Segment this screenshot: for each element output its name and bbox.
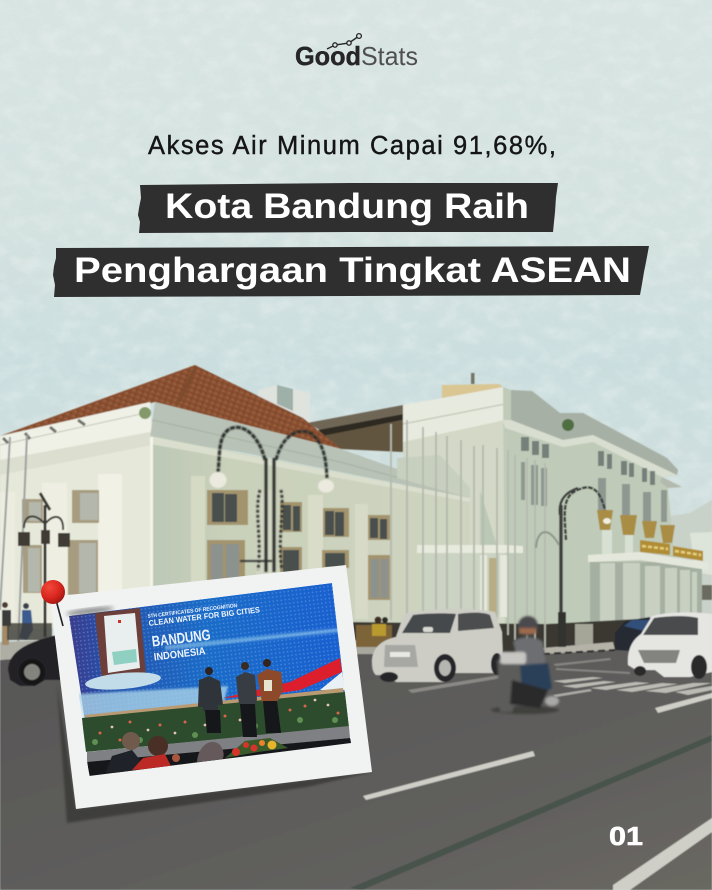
- backdrop text: CLEAN WATER FOR BIG CITIES: [148, 605, 261, 628]
- person right holding certificate: [257, 659, 283, 733]
- rooftop white box: [258, 385, 310, 422]
- main front wall: [152, 436, 470, 625]
- street lamp, left: [18, 493, 70, 637]
- headline tape 1: [138, 183, 558, 233]
- right white car: [628, 612, 712, 679]
- road markings: [363, 658, 712, 890]
- plants on parapet: [139, 407, 151, 419]
- entrance canopy at tower: [417, 545, 523, 553]
- left wing cornice: [0, 402, 152, 462]
- street lamp, right: [536, 487, 605, 647]
- right wing grey parapet: [511, 390, 678, 475]
- portico columns: [600, 563, 697, 623]
- red push pin: [41, 580, 65, 626]
- main front windows: [207, 490, 390, 600]
- paper background: [0, 0, 712, 560]
- dark base left: [7, 623, 52, 640]
- subtitle: Akses Air Minum Capai 91,68%,: [148, 132, 556, 160]
- dark car at left: [8, 634, 62, 686]
- ornate street lamp, centre: [210, 427, 334, 572]
- gold sign: [640, 540, 703, 561]
- yellow rooftop unit and antenna: [442, 384, 503, 398]
- stage front: [87, 738, 352, 778]
- tile roof: [0, 365, 341, 449]
- photo: city hall building and street: [0, 365, 712, 890]
- pedestal: [85, 672, 161, 690]
- backdrop: [69, 583, 345, 720]
- headline tape 2: [53, 246, 649, 297]
- sidewalk at base: [351, 640, 395, 656]
- page number: 01: [609, 821, 643, 851]
- award stage photo: [69, 583, 352, 778]
- rear dark roof: [307, 405, 403, 430]
- road: [0, 650, 712, 890]
- portico recess: [590, 562, 702, 624]
- dentils: [3, 420, 85, 443]
- audience: [106, 732, 224, 775]
- backdrop text: BANDUNG: [151, 627, 212, 651]
- headline tape 1: Kota Bandung Raih: [165, 187, 529, 226]
- left wing windows: [22, 490, 99, 595]
- gold pots: [597, 510, 675, 543]
- bouquet: [225, 738, 288, 758]
- building base shadow: [345, 615, 712, 655]
- pin shadow: [66, 605, 114, 617]
- green road line: [350, 735, 712, 890]
- flower bed: [82, 692, 349, 752]
- seated visitors: [356, 616, 392, 647]
- logo: GoodStats: Good: [295, 41, 361, 71]
- flagpoles: [391, 420, 545, 650]
- photo card with award stage: [50, 565, 372, 823]
- setback block near tower: [397, 455, 470, 498]
- left wing wall: [0, 445, 153, 630]
- main front cornice: [150, 402, 470, 498]
- logo: GoodStats: Stats: [361, 41, 418, 71]
- plaque: [95, 608, 146, 682]
- red swoosh: [223, 658, 342, 698]
- planter: [575, 624, 593, 645]
- backdrop text: 5TH CERTIFICATES OF RECOGNITION: [148, 603, 238, 620]
- motorbike and rider: [491, 616, 559, 714]
- stage floor: [87, 726, 350, 763]
- right wing windows: [521, 437, 655, 485]
- sidewalk: [0, 640, 615, 660]
- backdrop text: INDONESIA: [153, 645, 207, 664]
- tower front: [403, 387, 505, 625]
- person middle: [236, 662, 257, 737]
- card shadow: [57, 685, 372, 823]
- wooden ledge: [85, 688, 344, 721]
- white card: [50, 565, 372, 809]
- dark parked car: [615, 617, 650, 652]
- portico roof: [588, 552, 708, 570]
- headline tape 2: Penghargaan Tingkat ASEAN: [74, 251, 631, 290]
- pedestrians: [2, 602, 33, 645]
- backdrop text: [148, 603, 260, 660]
- flagpoles at left edge: [0, 435, 27, 647]
- silver SUV: [372, 609, 503, 682]
- logo: GoodStats: [295, 34, 418, 71]
- far right building: [670, 500, 712, 615]
- person left: [198, 667, 223, 733]
- corner pilasters: [98, 474, 122, 624]
- building: [0, 365, 712, 656]
- right wing wall: [503, 387, 682, 628]
